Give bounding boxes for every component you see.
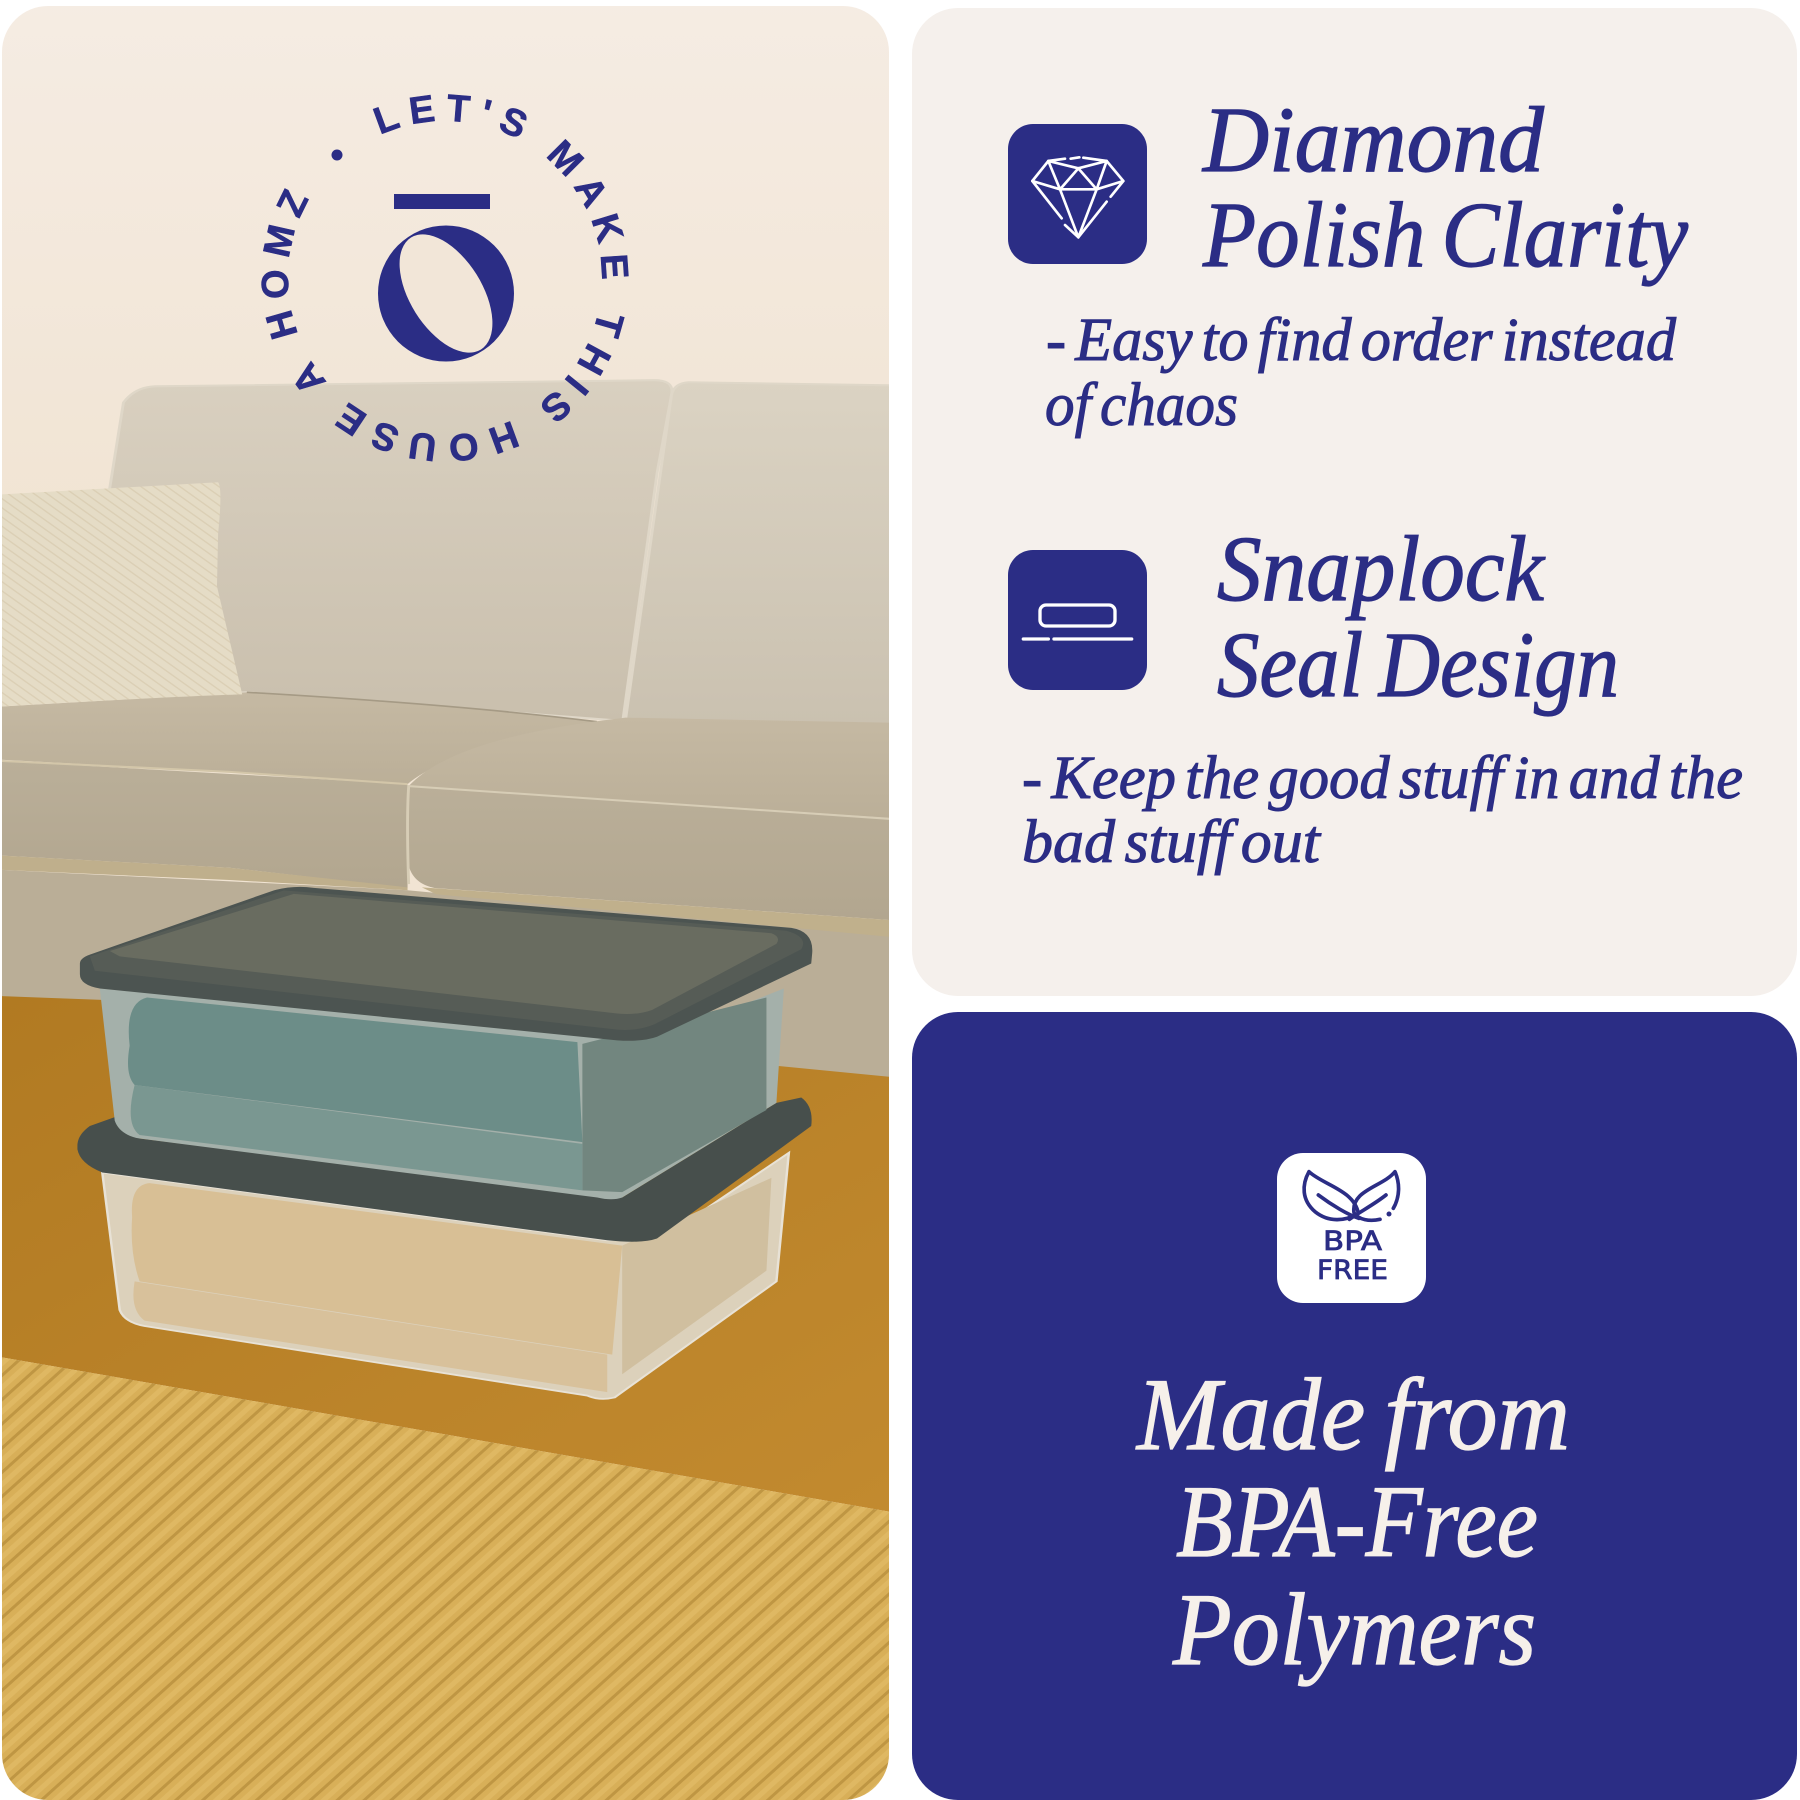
heading: Diamond Polish Clarity [1201,89,1689,287]
stacked storage boxes [77,887,812,1399]
circular logo badge [261,94,629,462]
heading: Diamond Polish Clarity: Polish Clarity [1202,184,1689,287]
text: keep the good stuff: - Keep the good stuff in and the [1022,745,1743,812]
top box [80,887,812,1199]
heading: Made from BPA-Free Polymers: Polymers [1172,1573,1536,1687]
text: keep the good stuff: bad stuff out [1022,809,1322,876]
icon: diamond [1008,124,1147,264]
heading: Diamond Polish Clarity: Diamond [1201,89,1544,192]
rug [0,1357,891,1800]
panel: BPA free [912,1012,1797,1800]
text: easy to find order [1045,307,1676,439]
icon: snaplock seal [1008,550,1147,690]
bottom box [77,1097,812,1399]
icon: BPA free leaves [1277,1153,1426,1303]
heading: Snaplock Seal Design: Seal Design [1217,614,1619,717]
heading: Made from BPA-Free Polymers: Made from [1135,1358,1570,1472]
text: easy to find order: of chaos [1045,372,1238,439]
text: easy to find order: - Easy to find order instead [1046,307,1676,374]
heading: Made from BPA-Free Polymers: BPA-Free [1176,1465,1538,1579]
icon: BPA free leaves: BPA [1323,1226,1383,1257]
panel: features [912,8,1797,996]
heading: Snaplock Seal Design: Snaplock [1217,518,1546,621]
circular slogan text: LET'S MAKE THIS HOUSE A HOMZ [261,94,629,462]
text: keep the good stuff [1022,745,1743,876]
panel: product photo scene [2,6,889,1800]
logo mark [378,194,514,369]
sofa [0,380,901,1125]
floor [0,996,891,1512]
heading: Made from BPA-Free Polymers [1135,1358,1570,1687]
icon: BPA free leaves: FREE [1317,1255,1388,1286]
heading: Snaplock Seal Design [1217,518,1619,717]
